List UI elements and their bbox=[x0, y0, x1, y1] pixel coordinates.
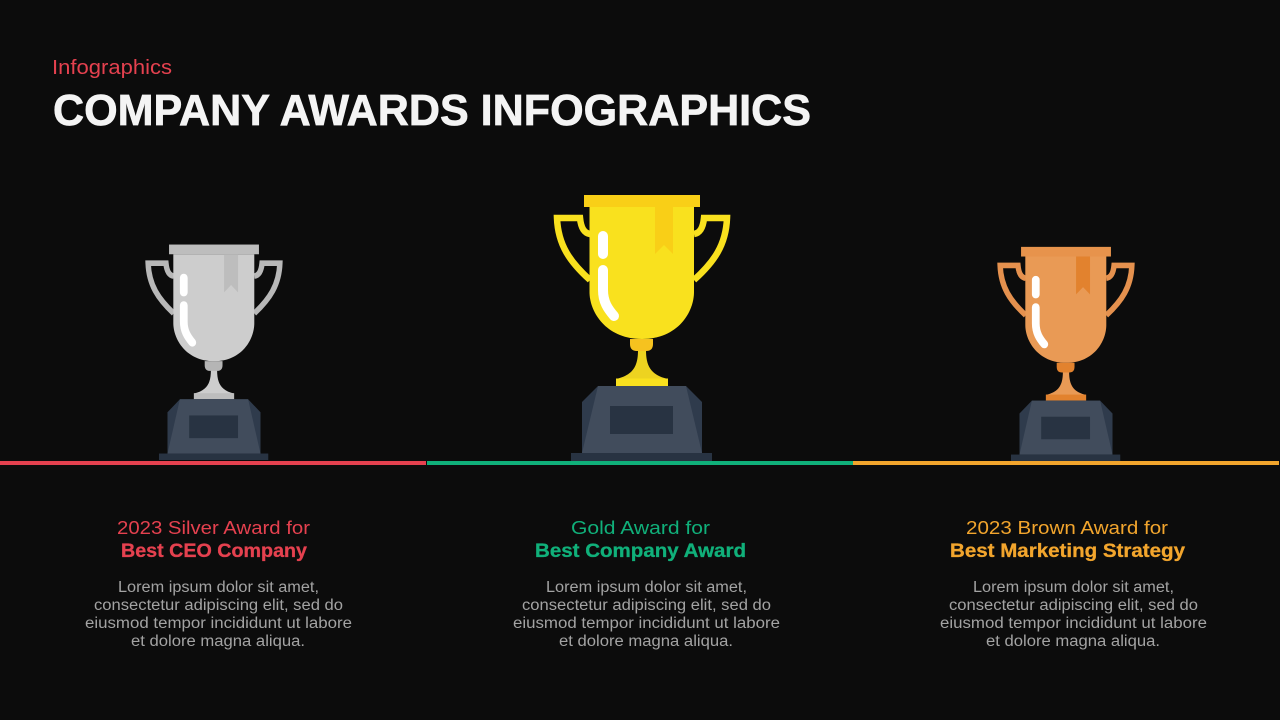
bronze award description bbox=[940, 579, 1207, 650]
bronze award heading: Best Marketing Strategy bbox=[950, 541, 1185, 562]
bronze award description: eiusmod tempor incididunt ut labore bbox=[940, 615, 1207, 632]
gold award description: Lorem ipsum dolor sit amet, bbox=[546, 579, 747, 596]
panel: bronze award text bbox=[940, 517, 1207, 650]
gold award description bbox=[513, 579, 780, 650]
bronze award description: et dolore magna aliqua. bbox=[986, 633, 1160, 650]
silver award description: eiusmod tempor incididunt ut labore bbox=[85, 615, 352, 632]
panel: gold award text bbox=[513, 517, 780, 650]
panel: silver award text bbox=[85, 517, 352, 650]
silver award description: et dolore magna aliqua. bbox=[131, 633, 305, 650]
silver award heading: Best CEO Company bbox=[121, 541, 307, 562]
bronze award heading: 2023 Brown Award for bbox=[966, 517, 1168, 538]
silver award description bbox=[85, 579, 352, 650]
gold award heading: Best Company Award bbox=[535, 541, 746, 562]
silver award description: Lorem ipsum dolor sit amet, bbox=[118, 579, 319, 596]
timeline bar bbox=[0, 461, 1279, 465]
icon: silver trophy bbox=[148, 245, 280, 460]
bronze award description: consectetur adipiscing elit, sed do bbox=[949, 597, 1198, 614]
gold award heading: Gold Award for bbox=[571, 517, 710, 538]
gold award description: eiusmod tempor incididunt ut labore bbox=[513, 615, 780, 632]
header bbox=[52, 57, 811, 135]
gold award description: consectetur adipiscing elit, sed do bbox=[522, 597, 771, 614]
title: COMPANY AWARDS INFOGRAPHICS bbox=[53, 86, 811, 135]
icon: gold trophy bbox=[557, 195, 727, 461]
bronze award heading bbox=[950, 517, 1185, 562]
silver award heading bbox=[117, 517, 310, 562]
gold award heading bbox=[535, 517, 746, 562]
gold award description: et dolore magna aliqua. bbox=[559, 633, 733, 650]
bronze award description: Lorem ipsum dolor sit amet, bbox=[973, 579, 1174, 596]
silver award description: consectetur adipiscing elit, sed do bbox=[94, 597, 343, 614]
icon: bronze trophy bbox=[1000, 247, 1132, 461]
silver award heading: 2023 Silver Award for bbox=[117, 517, 310, 538]
eyebrow label: Infographics bbox=[52, 57, 172, 79]
